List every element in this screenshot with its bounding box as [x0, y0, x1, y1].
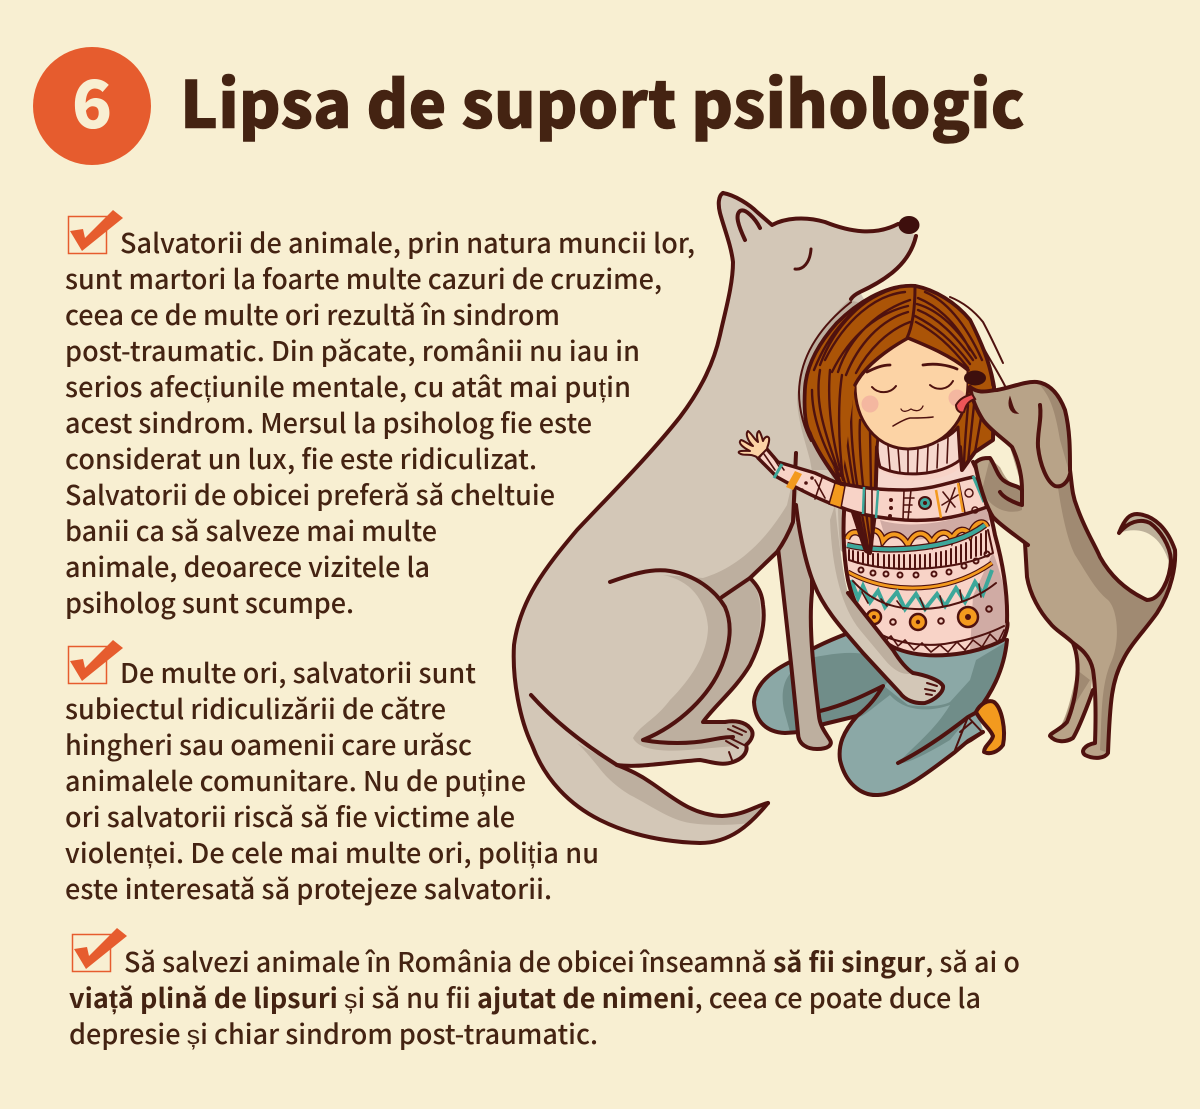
- dog eye: [1009, 398, 1017, 413]
- paragraph 1: Salvatorii de animale, prin natura muncii lor,: [120, 222, 695, 261]
- fringe: [805, 286, 1005, 484]
- girl arm: [758, 448, 987, 520]
- paragraph 1: ceea ce de multe ori rezultă în sindrom: [65, 294, 560, 333]
- rib band: [849, 530, 993, 569]
- wolf far front leg: [776, 520, 831, 749]
- wolf near front leg: [796, 470, 943, 703]
- girl face: [855, 338, 968, 449]
- checklist item 3: [69, 928, 1020, 1052]
- title: Lipsa de suport psihologic: [180, 53, 1025, 147]
- girl hair back: [805, 286, 994, 553]
- nose: [901, 406, 923, 411]
- girl hand: [739, 431, 769, 458]
- sweater arcs: [847, 522, 987, 545]
- jeans: [754, 634, 1007, 795]
- orange bar: [848, 563, 992, 588]
- cheeks: [862, 396, 878, 412]
- paragraph 1: serios afecțiunile mentale, cu atât mai puțin: [65, 366, 631, 405]
- conclusion text: [69, 941, 1020, 1052]
- zigzag band: [851, 570, 992, 609]
- checkbox icon: [68, 640, 123, 684]
- dog shading: [982, 382, 1171, 753]
- checklist item 1: [65, 210, 695, 621]
- conclusion text: depresie și chiar sindrom post-traumatic.: [69, 1013, 598, 1052]
- illustration: wolf, girl and dog: [514, 193, 1175, 843]
- arm patterns: [764, 451, 784, 470]
- sweater shading: [970, 552, 1007, 651]
- conclusion text: viață plină de lipsuri și să nu fii ajutat de nimeni, ceea ce poate duce la: [69, 977, 981, 1016]
- eyes: [872, 386, 896, 392]
- tongue: [956, 394, 975, 413]
- paragraph 2: [65, 652, 599, 907]
- paragraph 1: animale, deoarece vizitele la: [65, 546, 430, 585]
- dog nose: [964, 370, 986, 386]
- paragraph 1: post-traumatic. Din păcate, românii nu iau in: [65, 330, 640, 369]
- number badge: 6: [72, 52, 112, 148]
- sweater: [844, 458, 1008, 655]
- paragraph 2: De multe ori, salvatorii sunt: [120, 652, 476, 691]
- paragraph 1: acest sindrom. Mersul la psiholog fie este: [65, 402, 592, 441]
- paragraph 1: considerat un lux, fie este ridiculizat.: [65, 438, 537, 477]
- conclusion text: Să salvezi animale în România de obicei înseamnă să fii singur, să ai o: [124, 941, 1020, 980]
- paragraph 2: violenței. De cele mai multe ori, poliția nu: [65, 832, 599, 871]
- dog ear: [1038, 405, 1070, 486]
- paragraph 2: subiectul ridiculizării de către: [65, 688, 446, 727]
- dog outline: [970, 382, 1175, 758]
- teal band: [847, 525, 985, 549]
- number badge: [33, 47, 151, 165]
- wolf ear and head: [723, 193, 920, 299]
- paragraph 1: [65, 222, 695, 621]
- checkbox icon: [68, 210, 123, 254]
- turtleneck: [877, 427, 960, 474]
- sweater circles: [867, 606, 992, 630]
- paragraph 1: banii ca să salveze mai multe: [65, 510, 437, 549]
- mouth: [893, 417, 933, 426]
- checklist item 2: [65, 640, 599, 907]
- hem band: [878, 626, 1004, 645]
- checkbox icon: [72, 928, 127, 972]
- wolf body: [514, 193, 920, 843]
- paragraph 1: Salvatorii de obicei preferă să cheltuie: [65, 474, 555, 513]
- paragraph 1: sunt martori la foarte multe cazuri de cruzime,: [65, 258, 662, 297]
- dog: [956, 370, 1175, 758]
- wolf shading: [577, 300, 890, 825]
- dots row: [858, 552, 990, 578]
- wolf nose: [898, 216, 920, 234]
- paragraph 2: ori salvatorii riscă să fie victime ale: [65, 796, 515, 835]
- paragraph 1: psiholog sunt scumpe.: [65, 582, 354, 621]
- paragraph 2: hingheri sau oamenii care urăsc: [65, 724, 472, 763]
- shoe: [976, 701, 1004, 753]
- paragraph 2: este interesată să protejeze salvatorii.: [65, 868, 552, 907]
- sweater outline: [844, 462, 1008, 655]
- eyebrows: [867, 365, 890, 372]
- paragraph 2: animalele comunitare. Nu de puține: [65, 760, 526, 799]
